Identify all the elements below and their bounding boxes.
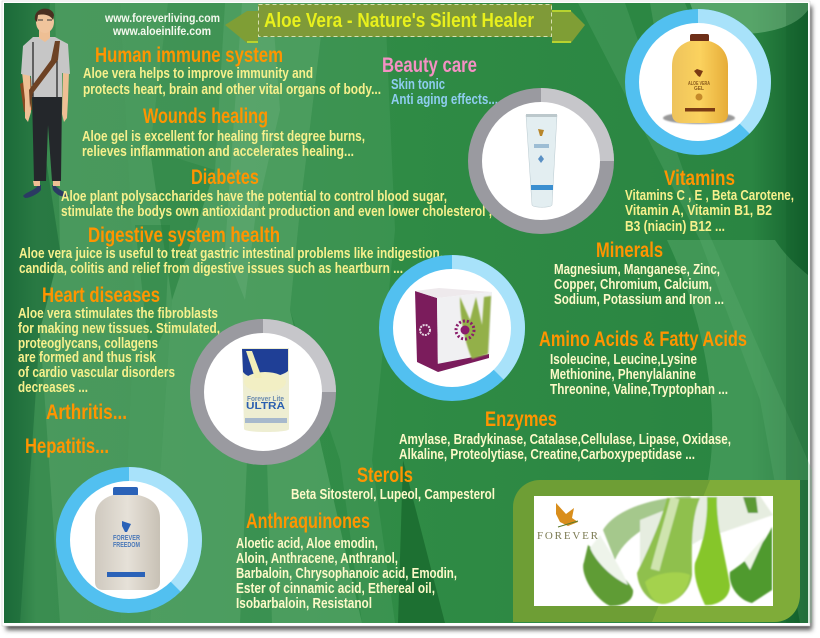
section: heart diseases: proteoglycans, collagens bbox=[18, 336, 158, 352]
section: diabetes: Diabetes bbox=[191, 166, 259, 189]
product ring: forever ultra bbox=[190, 319, 336, 465]
section: human immune system: protects heart, brain and other vital organs of body... bbox=[83, 82, 381, 98]
section: anthraquinones bbox=[236, 510, 457, 612]
section: beauty care bbox=[382, 54, 498, 108]
section: digestive system health: candida, colitis and relief from digestive issues such as heartburn ... bbox=[19, 261, 403, 277]
section: beauty care: Beauty care bbox=[382, 54, 477, 77]
left column text bbox=[18, 44, 492, 458]
section: human immune system: Aloe vera helps to improve immunity and bbox=[83, 66, 313, 82]
section: minerals: Magnesium, Manganese, Zinc, bbox=[554, 262, 720, 278]
section: minerals: Sodium, Potassium and Iron ... bbox=[554, 292, 724, 308]
section: wounds healing: Aloe gel is excellent for healing first degree burns, bbox=[82, 129, 365, 145]
right arrow bbox=[552, 11, 585, 43]
website links: www.aloeinlife.com bbox=[112, 24, 211, 38]
section: anthraquinones: Barbaloin, Chrysophanoic acid, Emodin, bbox=[236, 566, 457, 582]
website links: www.foreverliving.com bbox=[104, 11, 220, 25]
product ring: aloe vera gel bbox=[625, 9, 771, 155]
section: anthraquinones: Isobarbaloin, Resistanol bbox=[236, 596, 372, 612]
section: amino acids and fatty acids: Isoleucine, Leucine,Lysine bbox=[550, 352, 697, 368]
logo bbox=[537, 503, 599, 542]
section: wounds healing: relieves inflammation and accelerates healing... bbox=[82, 144, 354, 160]
photo bbox=[534, 496, 773, 606]
section: digestive system health: Digestive system health bbox=[88, 224, 280, 247]
section: minerals bbox=[554, 239, 724, 308]
section: beauty care: Skin tonic bbox=[391, 77, 445, 93]
section: sterols: Sterols bbox=[357, 464, 413, 487]
section: enzymes bbox=[399, 408, 731, 463]
section: amino acids and fatty acids: Amino Acids & Fatty Acids bbox=[539, 328, 747, 351]
section: vitamins: Vitamin A, Vitamin B1, B2 bbox=[625, 203, 772, 219]
section: beauty care: Anti aging effects... bbox=[391, 92, 498, 108]
section: heart diseases: are formed and thus risk bbox=[18, 350, 157, 366]
section: anthraquinones: Ester of cinnamic acid, Ethereal oil, bbox=[236, 581, 435, 597]
left arrow bbox=[225, 11, 258, 43]
section: anthraquinones: Anthraquinones bbox=[246, 510, 370, 533]
product ring: forever ultra: ULTRA bbox=[246, 401, 285, 412]
section: heart diseases: decreases ... bbox=[18, 380, 88, 396]
section: digestive system health bbox=[19, 224, 443, 277]
heading: hepatitis: Hepatitis... bbox=[25, 435, 109, 458]
section: sterols: Beta Sitosterol, Lupeol, Campesterol bbox=[291, 487, 495, 503]
section: heart diseases: of cardio vascular disorders bbox=[18, 365, 175, 381]
section: vitamins bbox=[625, 167, 794, 235]
section: digestive system health: Aloe vera juice is useful to treat gastric intestinal problems like indigestion, bbox=[19, 246, 443, 262]
product ring: aloe vera gel: ALOE VERA bbox=[688, 81, 710, 87]
section: sterols bbox=[291, 464, 495, 503]
product ring: aloe lotion bbox=[468, 88, 614, 234]
section: enzymes: Enzymes bbox=[485, 408, 557, 431]
heading: arthritis: Arthritis... bbox=[46, 401, 127, 424]
section: wounds healing bbox=[82, 105, 365, 160]
section: anthraquinones: Aloetic acid, Aloe emodin, bbox=[236, 536, 378, 552]
section: enzymes: Amylase, Bradykinase, Catalase,Cellulase, Lipase, Oxidase, bbox=[399, 432, 731, 448]
logo: FOREVER bbox=[537, 530, 599, 542]
product ring: forever ultra: Forever Lite bbox=[247, 396, 284, 403]
section: anthraquinones: Aloin, Anthracene, Anthranol, bbox=[236, 551, 398, 567]
section: diabetes: stimulate the bodys own antioxidant production and even lower cholesterol , bbox=[61, 204, 492, 220]
section: heart diseases: for making new tissues. Stimulated, bbox=[18, 321, 220, 337]
section: amino acids and fatty acids: Methionine, Phenylalanine bbox=[550, 367, 696, 383]
website links bbox=[104, 11, 220, 38]
section: heart diseases: Aloe vera stimulates the fibroblasts bbox=[18, 306, 218, 322]
section: heart diseases: Heart diseases bbox=[42, 284, 160, 307]
product ring: forever freedom: FOREVER bbox=[113, 535, 140, 542]
product ring: forever freedom: FREEDOM bbox=[113, 542, 140, 549]
product ring: aloe vera gel: GEL bbox=[694, 86, 704, 92]
title banner bbox=[225, 4, 585, 43]
section: minerals: Minerals bbox=[596, 239, 663, 262]
section: diabetes bbox=[61, 166, 492, 220]
section: diabetes: Aloe plant polysaccharides have the potential to control blood sugar, bbox=[61, 189, 447, 205]
product ring: aloe box bbox=[379, 255, 525, 401]
photo panel: aloe leaves with logo bbox=[513, 480, 800, 622]
product ring: forever freedom bbox=[56, 467, 202, 613]
icon: man illustration bbox=[20, 9, 70, 198]
title text: Aloe Vera - Nature's Silent Healer bbox=[264, 10, 534, 32]
section: enzymes: Alkaline, Proteolytiase, Creatine,Carboxypeptidase ... bbox=[399, 447, 695, 463]
section: amino acids and fatty acids bbox=[539, 328, 747, 398]
section: amino acids and fatty acids: Threonine, Valine,Tryptophan ... bbox=[550, 382, 728, 398]
section: human immune system: Human immune system bbox=[95, 44, 283, 67]
section: vitamins: Vitamins bbox=[664, 167, 735, 190]
section: heart diseases bbox=[18, 284, 220, 396]
section: human immune system bbox=[83, 44, 381, 98]
section: minerals: Copper, Chromium, Calcium, bbox=[554, 277, 712, 293]
section: wounds healing: Wounds healing bbox=[143, 105, 268, 128]
section: vitamins: B3 (niacin) B12 ... bbox=[625, 219, 725, 235]
